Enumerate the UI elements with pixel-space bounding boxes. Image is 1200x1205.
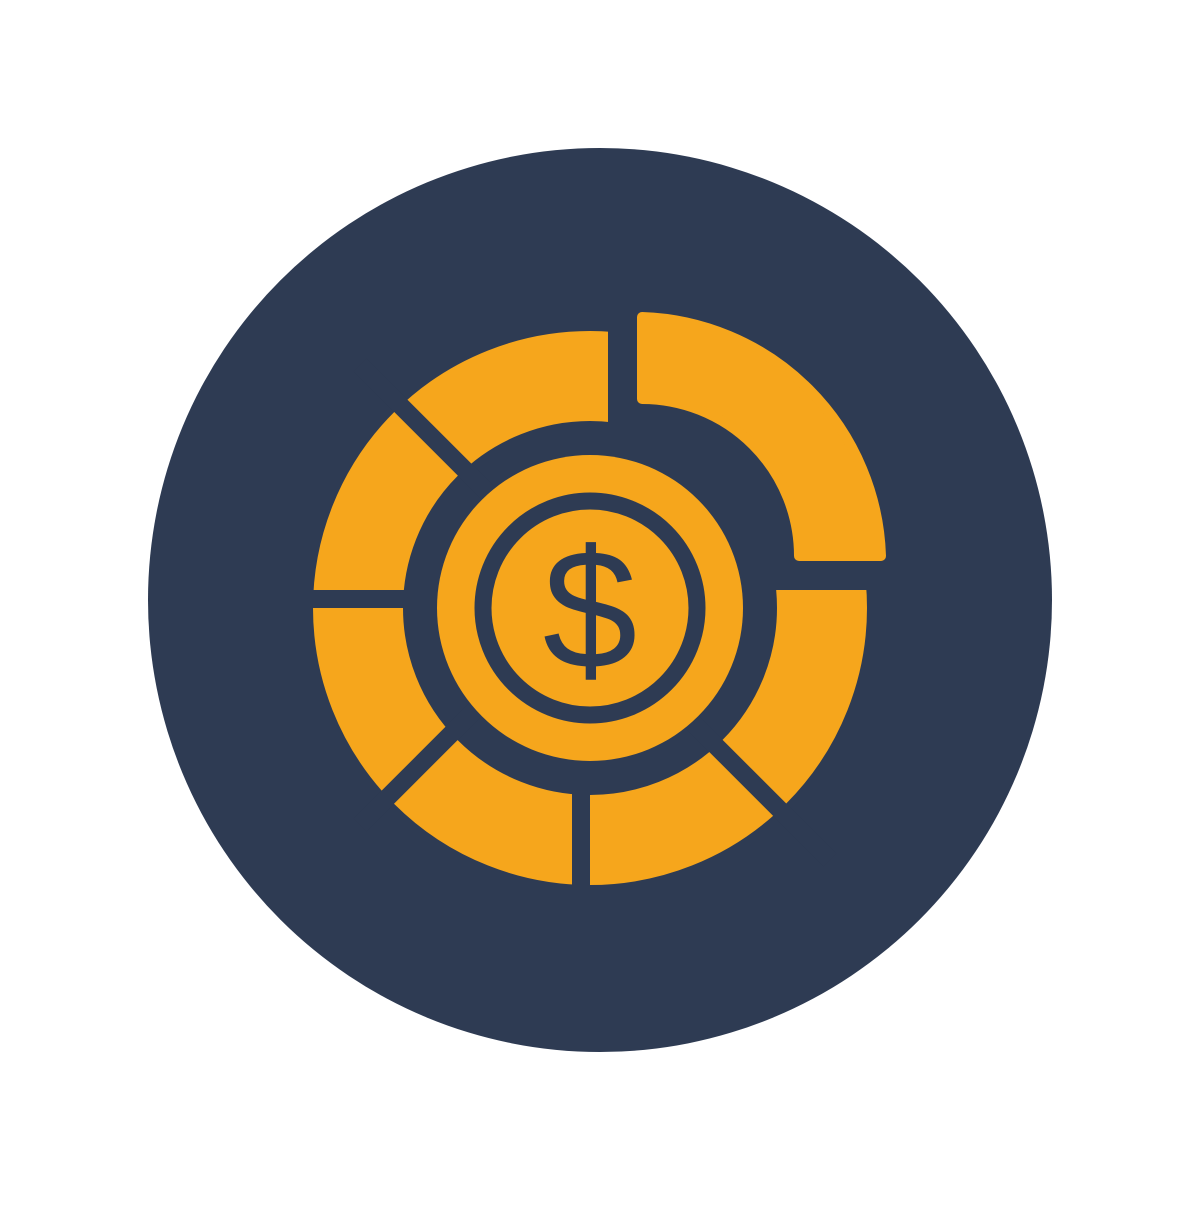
donut ring segments (300, 300, 908, 900)
exploded segment (642, 317, 881, 556)
coin (437, 455, 743, 761)
dollar sign: $ (543, 515, 637, 705)
background circle (148, 148, 1052, 1052)
